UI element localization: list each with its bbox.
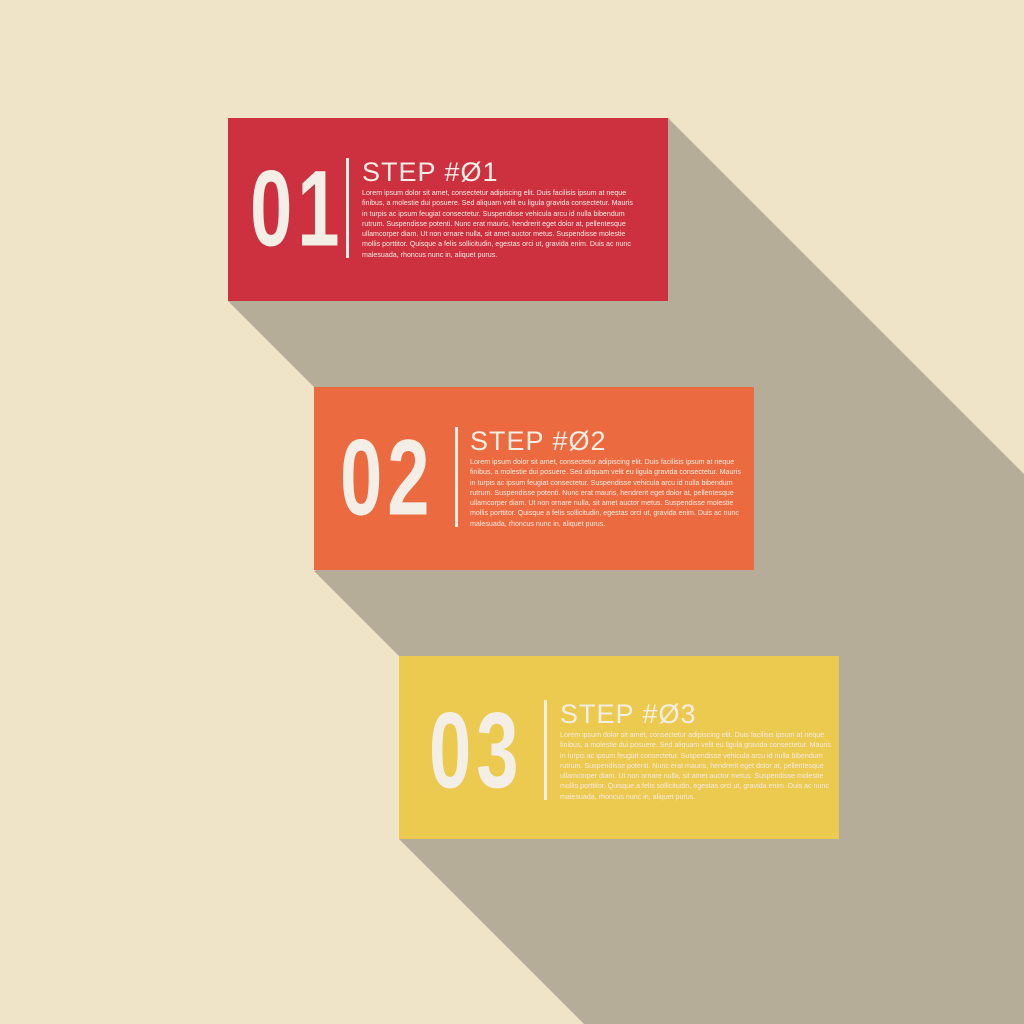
- text block 02: Lorem ipsum dolor sit amet, consectetur adipiscing elit. Duis facilisis ipsum at neque finibus, a molestie dui posuere. Sed aliquam velit eu ligula gravida consectetur. Mauris in turpis ac ipsum feugiat consectetur. Suspendisse vehicula arcu id nulla bibendum rutrum. Suspendisse potenti. Nunc erat mauris, hendrerit eget dolor at, pellentesque ullamcorper diam. Ut non ornare nulla, sit amet auctor metus. Suspendisse molestie mollis porttitor. Quisque a felis sollicitudin, egestas orci ut, gravida enim. Duis ac nunc malesuada, rhoncus nunc in, aliquet purus.: [470, 458, 741, 528]
- heading step 01: STEP #Ø1: [362, 157, 499, 187]
- heading step 02: STEP #Ø2: [470, 426, 607, 456]
- panel: step 03: [399, 656, 839, 839]
- text block 01: Lorem ipsum dolor sit amet, consectetur adipiscing elit. Duis facilisis ipsum at neque finibus, a molestie dui posuere. Sed aliquam velit eu ligula gravida consectetur. Mauris in turpis ac ipsum feugiat consectetur. Suspendisse vehicula arcu id nulla bibendum rutrum. Suspendisse potenti. Nunc erat mauris, hendrerit eget dolor at, pellentesque ullamcorper diam. Ut non ornare nulla, sit amet auctor metus. Suspendisse molestie mollis porttitor. Quisque a felis sollicitudin, egestas orci ut, gravida enim. Duis ac nunc malesuada, rhoncus nunc in, aliquet purus.: [362, 189, 633, 259]
- text block 03: Lorem ipsum dolor sit amet, consectetur adipiscing elit. Duis facilisis ipsum at neque finibus, a molestie dui posuere. Sed aliquam velit eu ligula gravida consectetur. Mauris in turpis ac ipsum feugiat consectetur. Suspendisse vehicula arcu id nulla bibendum rutrum. Suspendisse potenti. Nunc erat mauris, hendrerit eget dolor at, pellentesque ullamcorper diam. Ut non ornare nulla, sit amet auctor metus. Suspendisse molestie mollis porttitor. Quisque a felis sollicitudin, egestas orci ut, gravida enim. Duis ac nunc malesuada, rhoncus nunc in, aliquet purus.: [560, 731, 831, 801]
- number 01: 01: [250, 149, 345, 270]
- panel: step 02: [314, 387, 754, 570]
- heading step 03: STEP #Ø3: [560, 699, 697, 729]
- number 03: 03: [429, 691, 524, 812]
- number 02: 02: [340, 418, 435, 539]
- panel: step 01: [228, 118, 668, 301]
